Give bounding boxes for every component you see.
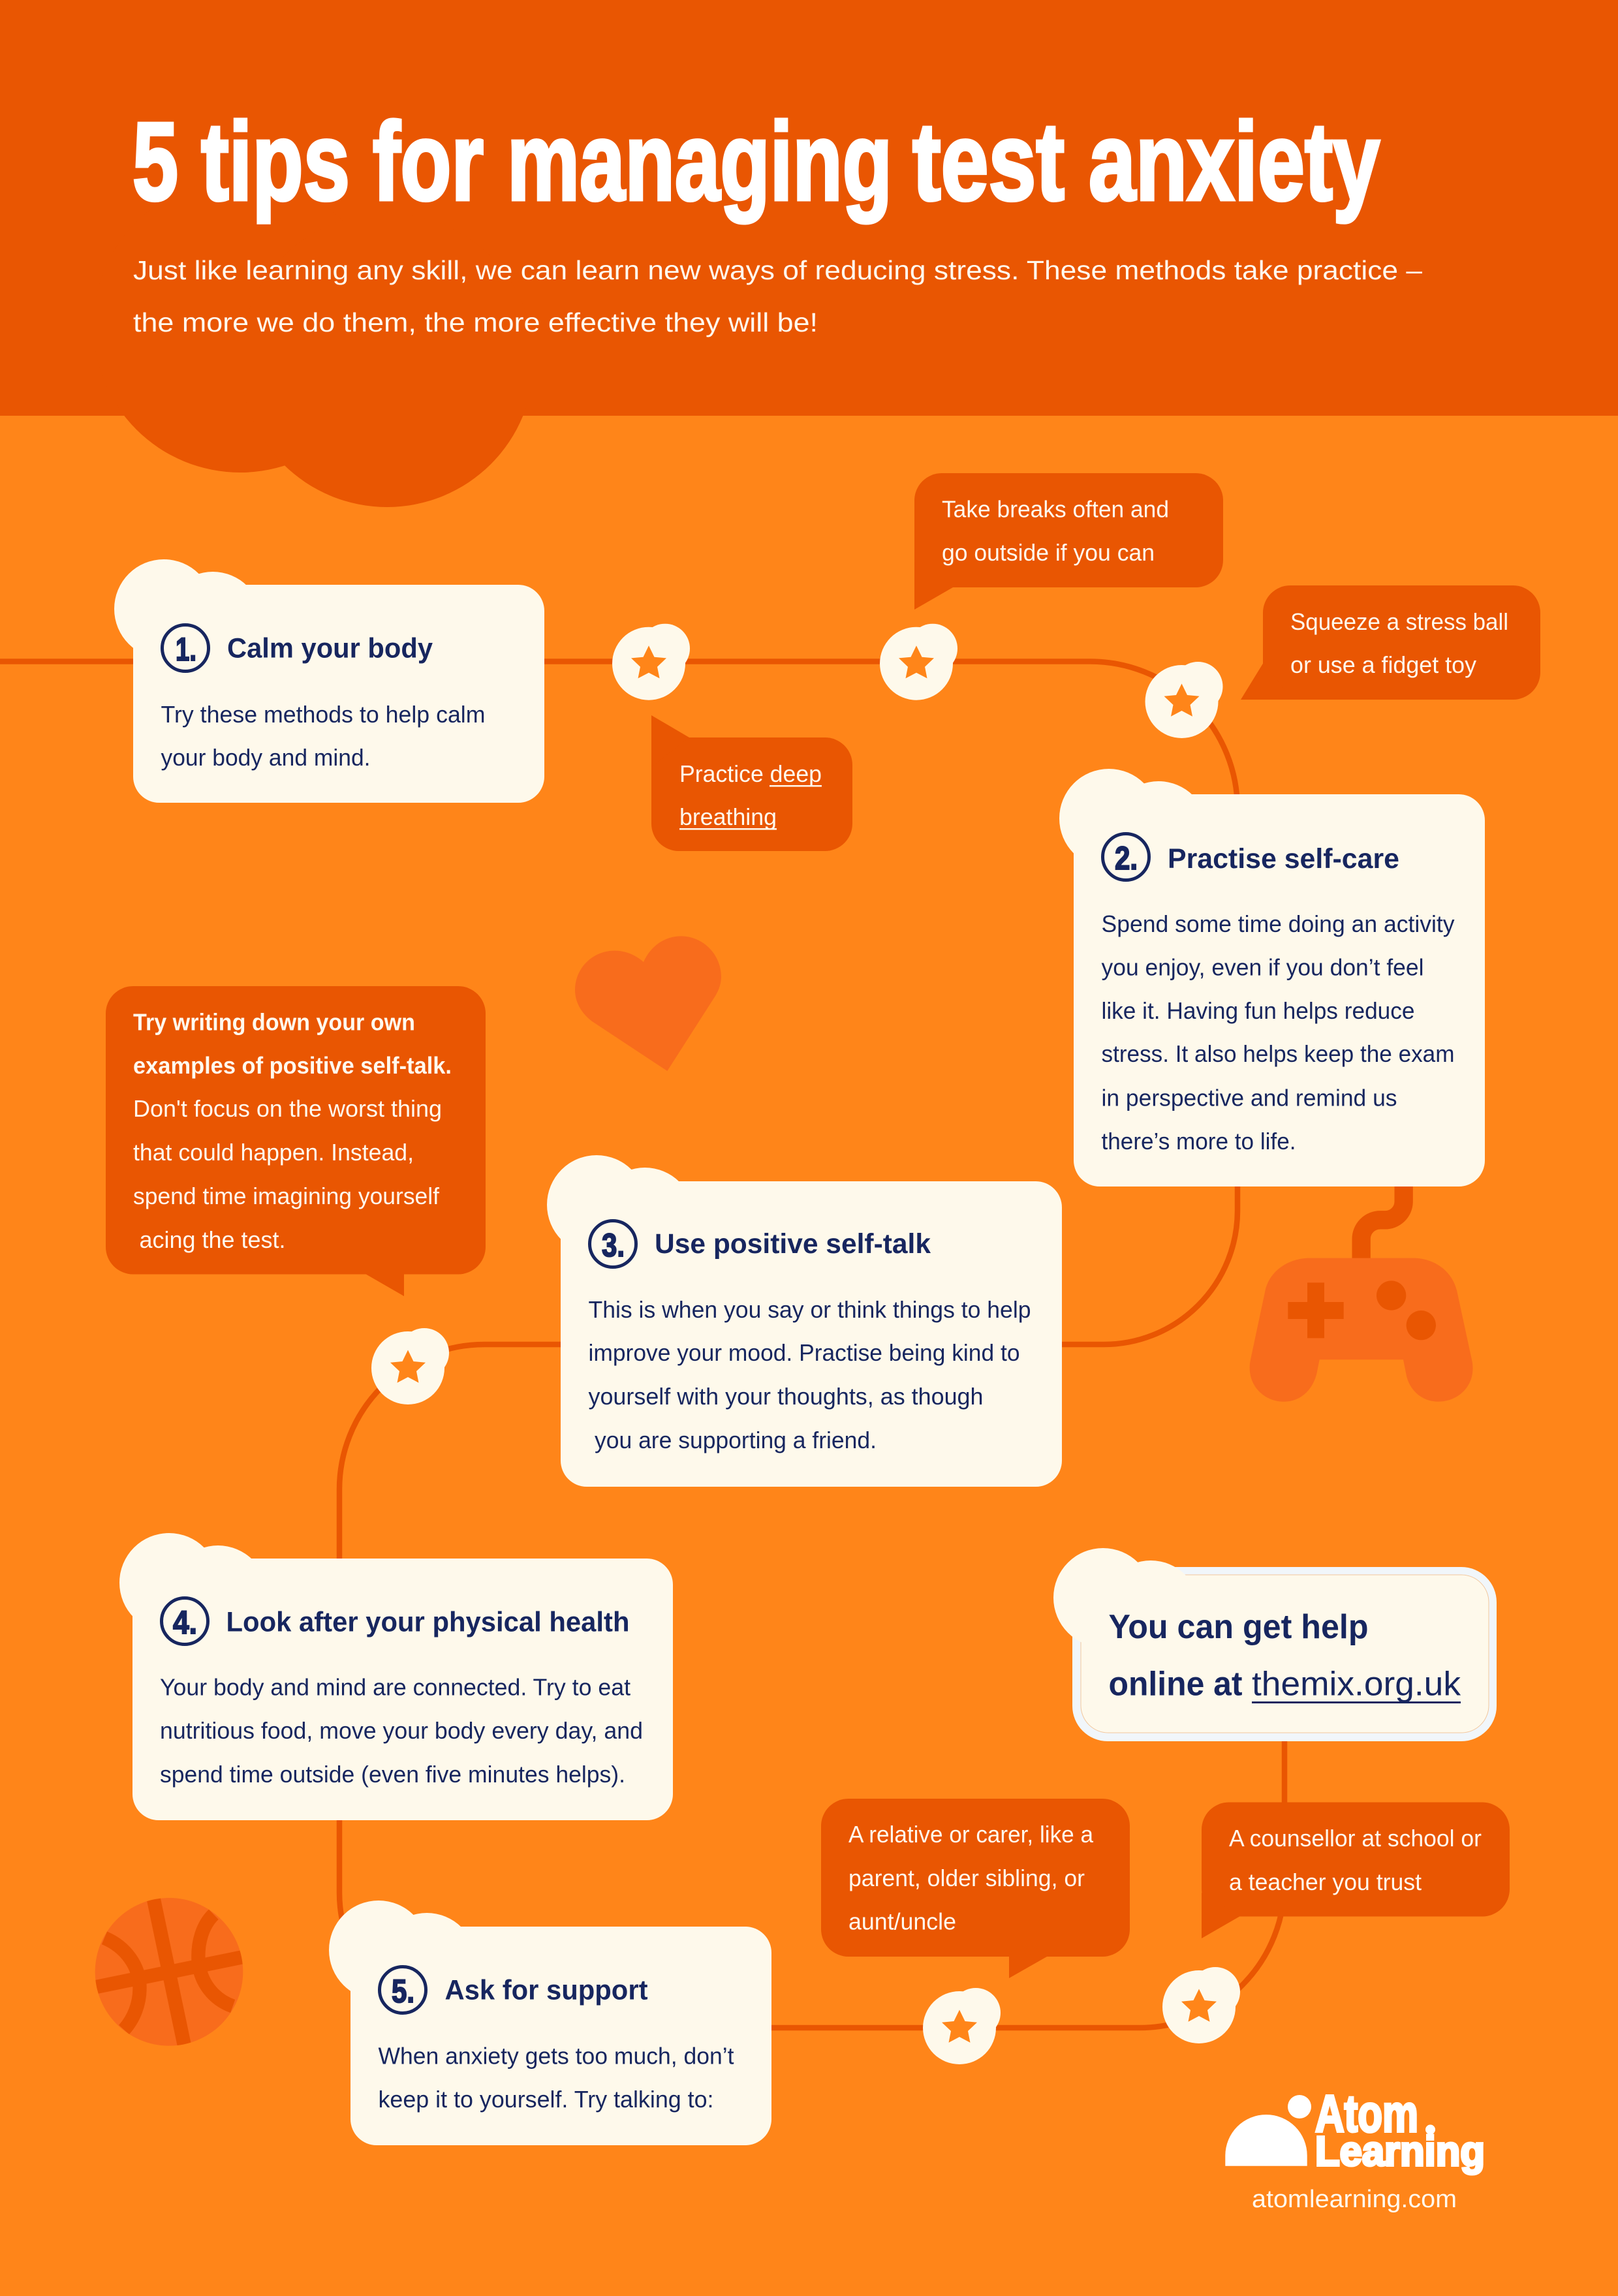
connector path xyxy=(0,662,1284,2028)
help text: online at xyxy=(1108,1666,1243,1703)
body text: in perspective and remind us xyxy=(1102,1085,1397,1111)
body text: nutritious food, move your body every day, and xyxy=(160,1717,643,1744)
icon: star marker 5 xyxy=(923,1988,1001,2064)
body text: keep it to yourself. Try talking to: xyxy=(379,2086,714,2113)
title: for xyxy=(373,100,484,224)
website url: atomlearning.com xyxy=(1252,2186,1457,2213)
heading: Practise self-care xyxy=(1168,843,1399,875)
body text: you are supporting a friend. xyxy=(595,1427,877,1453)
icon: star marker 6 xyxy=(1162,1967,1240,2043)
icon: basketball xyxy=(91,1895,247,2048)
speech bubble: positive self-talk xyxy=(106,986,486,1296)
speech bubble: positive self-talk: that could happen. Instead, xyxy=(133,1139,414,1166)
heading: Calm your body xyxy=(227,633,433,664)
speech bubble: take breaks xyxy=(914,473,1223,610)
number badge 2: 2. xyxy=(1115,840,1138,877)
heading: Use positive self-talk xyxy=(655,1228,931,1260)
body text: there’s more to life. xyxy=(1102,1128,1296,1155)
icon: game controller xyxy=(1250,1186,1473,1402)
logo: Atom Learning: Atom xyxy=(1315,2085,1418,2143)
body text: you enjoy, even if you don’t feel xyxy=(1102,954,1424,980)
title: test xyxy=(912,100,1065,224)
speech bubble: counsellor: a teacher you trust xyxy=(1229,1869,1422,1895)
icon: star marker 1 xyxy=(612,624,690,700)
speech bubble: practice deep breathing: breathing xyxy=(679,803,777,830)
icon: star marker 2 xyxy=(880,624,957,700)
help text xyxy=(1108,1608,1461,1703)
number badge 4: 4. xyxy=(173,1604,197,1641)
body text xyxy=(379,2043,734,2113)
intro text: the more we do them, the more effective they will be! xyxy=(133,307,818,337)
body text: improve your mood. Practise being kind to xyxy=(589,1339,1019,1366)
panel: tip 1 xyxy=(114,559,544,803)
speech bubble: positive self-talk: examples of positive self-talk. xyxy=(133,1052,452,1079)
icon: heart xyxy=(575,936,721,1071)
body text xyxy=(161,701,486,771)
logo: Atom Learning: Learning xyxy=(1315,2128,1485,2175)
body text xyxy=(589,1296,1031,1453)
title: anxiety xyxy=(1089,100,1380,224)
title: tips xyxy=(201,100,350,224)
speech bubble: counsellor xyxy=(1202,1803,1510,1938)
body text: Your body and mind are connected. Try to eat xyxy=(160,1673,630,1701)
number badge 5 xyxy=(380,1967,426,2013)
speech bubble: relative or carer: parent, older sibling, or xyxy=(848,1865,1085,1891)
body text: Try these methods to help calm xyxy=(161,701,486,728)
body text xyxy=(1102,910,1454,1155)
speech bubble: practice deep breathing xyxy=(651,715,852,851)
intro text: Just like learning any skill, we can learn new ways of reducing stress. These methods take practice – xyxy=(133,255,1422,285)
speech bubble: counsellor: A counsellor at school or xyxy=(1229,1825,1482,1852)
speech bubble: positive self-talk: acing the test. xyxy=(140,1226,286,1253)
title: managing xyxy=(507,100,892,224)
intro text xyxy=(133,255,1422,337)
speech bubble: relative or carer: A relative or carer, like a xyxy=(848,1821,1094,1848)
number badge 3: 3. xyxy=(602,1227,625,1264)
logo: Atom Learning xyxy=(1225,2085,1485,2175)
speech bubble: stress ball: or use a fidget toy xyxy=(1290,651,1476,678)
speech bubble: take breaks: go outside if you can xyxy=(942,539,1155,566)
panel: tip 5 xyxy=(329,1900,771,2145)
body text: When anxiety gets too much, don’t xyxy=(379,2043,734,2069)
body text xyxy=(160,1673,643,1788)
help text: You can get help xyxy=(1108,1608,1368,1646)
panel: get help online xyxy=(1053,1548,1497,1741)
header banner xyxy=(0,0,1618,507)
number badge 1: 1. xyxy=(176,631,196,668)
speech bubble: positive self-talk: Don't focus on the worst thing xyxy=(133,1095,442,1122)
body text: spend time outside (even five minutes helps). xyxy=(160,1761,625,1788)
panel: tip 4 xyxy=(119,1533,673,1820)
speech bubble: relative or carer xyxy=(821,1799,1130,1978)
speech bubble: take breaks: Take breaks often and xyxy=(942,496,1169,522)
speech bubble: relative or carer: aunt/uncle xyxy=(848,1908,956,1934)
body text: like it. Having fun helps reduce xyxy=(1102,997,1415,1024)
number badge 4 xyxy=(162,1598,208,1645)
number badge 2 xyxy=(1103,834,1149,880)
speech bubble: practice deep breathing: Practice deep xyxy=(679,760,822,787)
body text: your body and mind. xyxy=(161,744,371,771)
help text: themix.org.uk xyxy=(1252,1666,1461,1703)
heading: Ask for support xyxy=(445,1975,647,2006)
speech bubble: stress ball: Squeeze a stress ball xyxy=(1290,608,1508,635)
icon: star marker 3 xyxy=(1145,662,1223,738)
title: 5 xyxy=(132,100,178,224)
speech bubble: positive self-talk: Try writing down your own xyxy=(133,1009,415,1035)
body text: This is when you say or think things to help xyxy=(589,1296,1031,1323)
speech bubble: positive self-talk: spend time imagining yourself xyxy=(133,1183,440,1209)
body text: stress. It also helps keep the exam xyxy=(1102,1040,1454,1067)
panel: tip 3 xyxy=(547,1155,1062,1487)
speech bubble: stress ball xyxy=(1241,585,1540,700)
title xyxy=(132,100,1380,224)
heading: Look after your physical health xyxy=(226,1607,629,1638)
number badge 3 xyxy=(590,1220,636,1267)
body text: yourself with your thoughts, as though xyxy=(589,1383,983,1410)
number badge 5: 5. xyxy=(392,1973,414,2009)
body text: Spend some time doing an activity xyxy=(1102,910,1454,937)
number badge 1 xyxy=(162,625,209,671)
icon: star marker 4 xyxy=(371,1328,449,1404)
panel: tip 2 xyxy=(1059,769,1485,1187)
